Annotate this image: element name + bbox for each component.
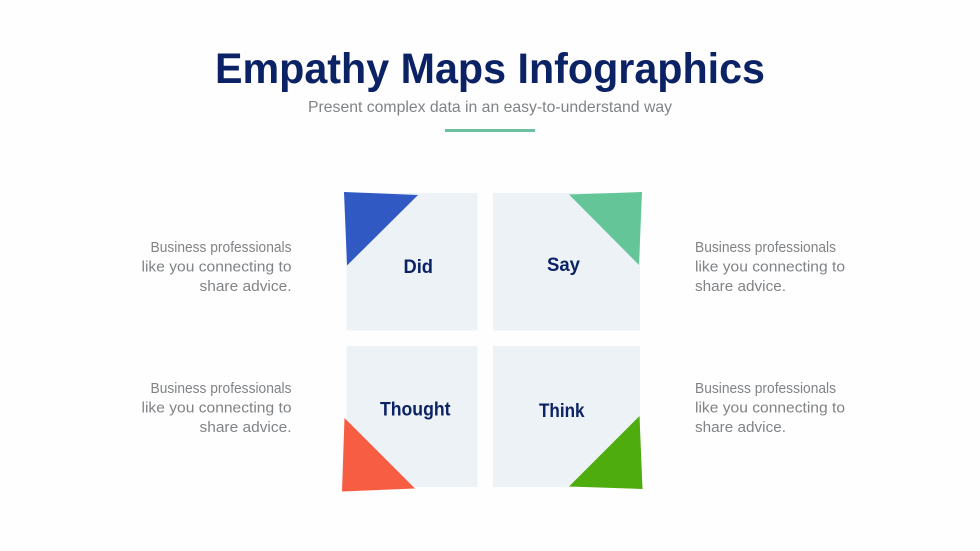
text block: bottom left: Business professionals (150, 381, 292, 397)
text block: top right: like you connecting to (695, 260, 845, 276)
text block: top left: like you connecting to (142, 260, 292, 276)
text block: bottom left: like you connecting to (142, 400, 292, 416)
panel: Think (493, 346, 642, 489)
text block: bottom right: Business professionals (695, 381, 836, 397)
icon: red corner triangle (342, 418, 415, 492)
title: Empathy Maps Infographics (215, 45, 765, 93)
icon: green corner triangle (569, 416, 642, 489)
subtitle: Present complex data in an easy-to-understand way (308, 99, 672, 116)
text block: bottom right: like you connecting to (695, 400, 845, 416)
panel: Thought (342, 346, 478, 492)
panel: Say (493, 192, 642, 330)
label: Thought: Thought (380, 398, 451, 420)
text block: top left: share advice. (200, 279, 292, 295)
text block: top right (695, 240, 845, 295)
text block: bottom right (695, 381, 845, 436)
icon: blue corner triangle (344, 192, 418, 266)
label: Did: Did (404, 256, 433, 278)
text block: top left: Business professionals (150, 240, 292, 256)
text block: top right: Business professionals (695, 240, 836, 256)
icon: teal corner triangle (569, 192, 642, 265)
accent underline (445, 129, 535, 132)
text block: bottom left (142, 381, 292, 436)
text block: bottom right: share advice. (695, 420, 786, 436)
text block: bottom left: share advice. (200, 420, 292, 436)
label: Say: Say (547, 254, 580, 276)
text block: top right: share advice. (695, 279, 786, 295)
label: Think: Think (539, 400, 585, 422)
panel: Did (344, 192, 478, 330)
text block: top left (142, 240, 292, 295)
